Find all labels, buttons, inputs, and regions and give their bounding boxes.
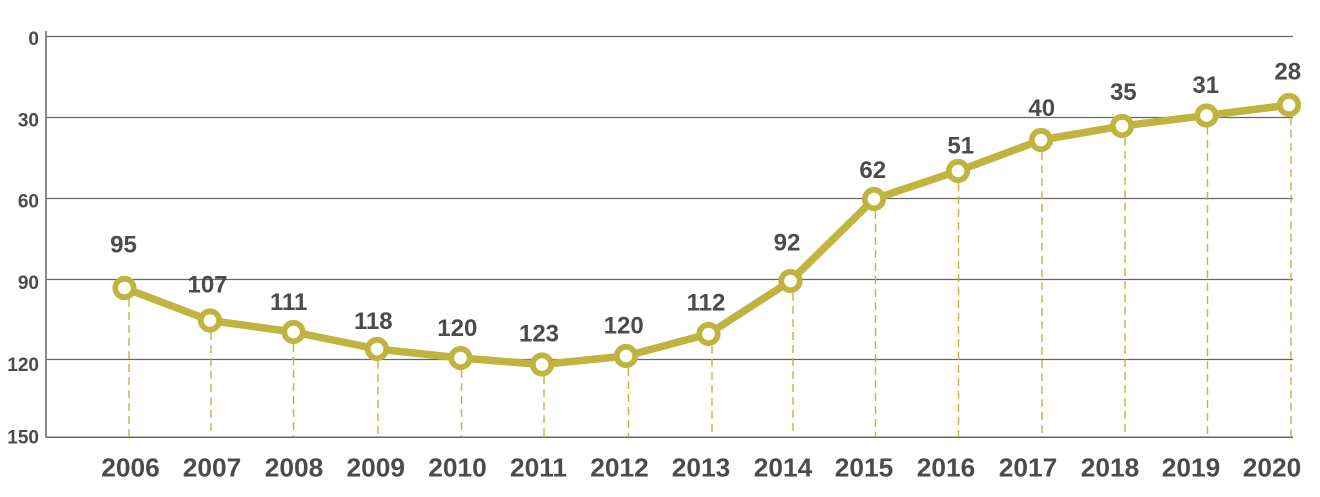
data value labels: 107 [187, 272, 228, 298]
data value labels: 31 [1192, 72, 1219, 99]
x axis year labels: 2020 [1243, 452, 1301, 482]
x axis year labels: 2013 [672, 452, 730, 482]
data value labels: 28 [1274, 58, 1301, 85]
data value labels: 118 [354, 308, 393, 335]
y axis labels: 60 [18, 192, 39, 212]
x axis year labels: 2016 [917, 452, 975, 482]
data value labels: 62 [859, 157, 886, 184]
x axis year labels: 2010 [428, 452, 487, 482]
data value labels: 120 [437, 315, 477, 342]
data point markers [115, 96, 1298, 374]
x axis year labels [101, 452, 1301, 482]
dashed drop lines [129, 117, 1291, 437]
data value labels: 112 [687, 290, 725, 316]
x axis year labels: 2009 [346, 452, 405, 482]
data value labels: 95 [110, 232, 137, 258]
data value labels: 120 [604, 312, 644, 339]
data value labels: 92 [774, 230, 800, 256]
x axis year labels: 2017 [999, 452, 1057, 482]
x axis year labels: 2018 [1081, 452, 1139, 482]
y axis labels [7, 29, 39, 448]
x axis year labels: 2012 [590, 452, 649, 482]
data value labels: 111 [270, 289, 307, 316]
data value labels: 51 [947, 132, 974, 159]
y axis labels: 90 [18, 273, 39, 294]
data value labels: 35 [1110, 79, 1137, 106]
x axis year labels: 2014 [754, 452, 813, 482]
data value labels: 123 [519, 321, 559, 348]
x axis year labels: 2011 [510, 452, 567, 482]
x axis year labels: 2019 [1162, 452, 1220, 482]
x axis year labels: 2006 [101, 452, 160, 482]
y axis labels: 0 [28, 29, 39, 50]
y axis labels: 150 [7, 428, 39, 448]
data value labels [110, 58, 1301, 348]
y axis labels: 30 [18, 110, 39, 132]
x axis year labels: 2008 [265, 452, 323, 482]
data line [124, 105, 1289, 364]
y axis labels: 120 [7, 355, 39, 376]
x axis year labels: 2007 [183, 452, 241, 482]
data value labels: 40 [1028, 95, 1055, 122]
x axis year labels: 2015 [835, 452, 893, 482]
